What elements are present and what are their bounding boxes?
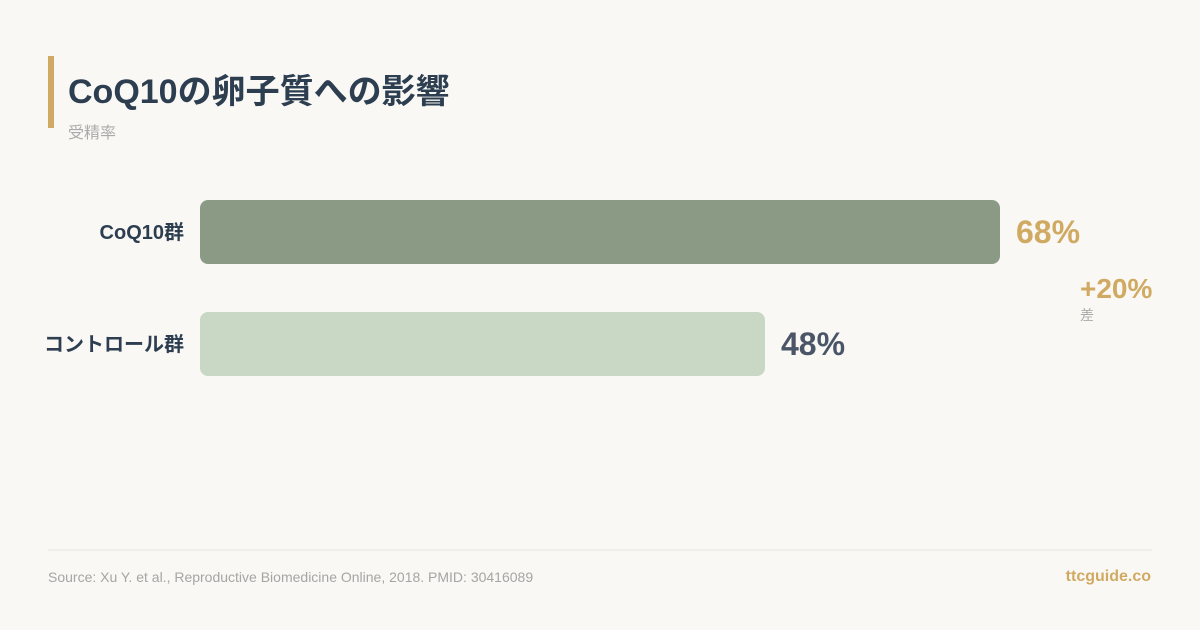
title: CoQ10の卵子質への影響 — [68, 73, 450, 111]
header accent bar — [48, 56, 54, 128]
bar: CoQ10 group — [200, 200, 1000, 264]
brand: ttcguide.co — [1066, 568, 1151, 585]
bar: control group — [200, 312, 765, 376]
subtitle: 受精率 — [68, 125, 116, 142]
difference value: +20% — [1080, 273, 1152, 304]
source text: Source: Xu Y. et al., Reproductive Biomedicine Online, 2018. PMID: 30416089 — [48, 569, 533, 585]
difference callout — [1080, 273, 1152, 323]
label: CoQ10 group: CoQ10群 — [100, 222, 184, 244]
footer divider — [48, 549, 1152, 551]
difference label: 差 — [1080, 307, 1094, 323]
label: control group: コントロール群 — [44, 334, 184, 356]
value: 48%: 48% — [781, 326, 845, 362]
value: 68%: 68% — [1016, 214, 1080, 250]
